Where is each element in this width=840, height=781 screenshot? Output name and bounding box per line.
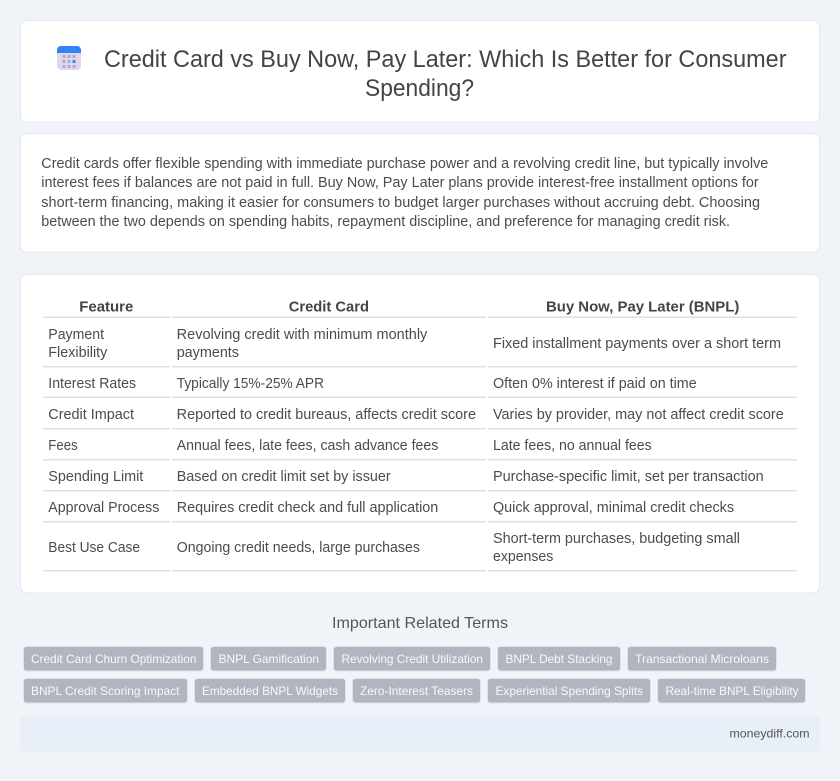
footer bar xyxy=(20,717,820,751)
related terms tags: Experiential Spending Splits xyxy=(496,684,643,698)
row: payment flexibility xyxy=(48,327,781,361)
icon: calendar xyxy=(57,46,81,70)
row: fees xyxy=(48,438,652,454)
related terms tags: Transactional Microloans xyxy=(635,652,769,666)
title: Spending? xyxy=(365,75,474,102)
row: credit impact: Varies by provider, may not affect credit score xyxy=(493,407,784,423)
row: approval process: Requires credit check and full application xyxy=(177,500,438,516)
row: interest rates xyxy=(48,376,697,392)
row: fees: Late fees, no annual fees xyxy=(493,438,652,454)
description text: interest fees if balances are not paid in full. Buy Now, Pay Later plans provide interest-free installment options for xyxy=(41,175,759,191)
footer bar: moneydiff.com xyxy=(730,726,810,740)
row: best use case: Best Use Case xyxy=(48,540,140,556)
row: payment flexibility: Payment xyxy=(48,327,104,343)
row: interest rates: Often 0% interest if paid on time xyxy=(493,376,697,392)
row: payment flexibility: payments xyxy=(177,345,239,361)
related terms heading: Important Related Terms xyxy=(332,615,508,632)
row: best use case: Ongoing credit needs, large purchases xyxy=(177,540,420,556)
row: interest rates: Interest Rates xyxy=(48,376,136,392)
related terms tags: Credit Card Churn Optimization xyxy=(31,652,196,666)
comparison table panel xyxy=(20,274,820,593)
row: credit impact xyxy=(48,407,784,423)
table header row: Feature xyxy=(79,298,133,316)
description text: between the two depends on spending habits, repayment discipline, and preference for managing credit risk. xyxy=(41,214,730,230)
related terms tags: Revolving Credit Utilization xyxy=(342,652,483,666)
row: payment flexibility: Revolving credit with minimum monthly xyxy=(177,327,428,343)
table header row: Buy Now, Pay Later (BNPL) xyxy=(546,298,739,316)
table header row xyxy=(79,298,739,316)
row: spending limit xyxy=(48,469,764,485)
row: payment flexibility: Fixed installment payments over a short term xyxy=(493,336,781,352)
title: Credit Card vs Buy Now, Pay Later: Which Is Better for Consumer xyxy=(104,46,787,73)
related terms tags: Real-time BNPL Eligibility xyxy=(666,684,798,698)
row: approval process xyxy=(48,500,734,516)
description text: short-term financing, making it easier for consumers to budget larger purchases without accruing debt. Choosing xyxy=(41,195,760,211)
row: spending limit: Spending Limit xyxy=(48,469,143,485)
related terms tags: Embedded BNPL Widgets xyxy=(202,684,338,698)
row: credit impact: Credit Impact xyxy=(48,407,134,423)
related terms tags: BNPL Debt Stacking xyxy=(506,652,612,666)
row: fees: Fees xyxy=(48,438,78,454)
related terms tags: BNPL Gamification xyxy=(218,652,319,666)
description text xyxy=(41,156,768,230)
row: credit impact: Reported to credit bureaus, affects credit score xyxy=(177,407,476,423)
table header row: Credit Card xyxy=(289,298,369,316)
row: interest rates: Typically 15%-25% APR xyxy=(177,376,324,392)
row: best use case: expenses xyxy=(493,549,553,565)
row: approval process: Approval Process xyxy=(48,500,159,516)
row: best use case xyxy=(48,531,740,565)
related terms tags xyxy=(24,646,806,703)
description text: Credit cards offer flexible spending with immediate purchase power and a revolving credit line, but typically involve xyxy=(41,156,768,172)
row: approval process: Quick approval, minimal credit checks xyxy=(493,500,734,516)
related terms tags: BNPL Credit Scoring Impact xyxy=(31,684,180,698)
row: best use case: Short-term purchases, budgeting small xyxy=(493,531,740,547)
row: fees: Annual fees, late fees, cash advance fees xyxy=(177,438,438,454)
title xyxy=(104,46,787,102)
related terms tags: Zero-Interest Teasers xyxy=(360,684,473,698)
header panel xyxy=(20,20,820,122)
description panel xyxy=(20,134,820,252)
row: payment flexibility: Flexibility xyxy=(48,345,108,361)
row: spending limit: Based on credit limit set by issuer xyxy=(177,469,391,485)
row: spending limit: Purchase-specific limit, set per transaction xyxy=(493,469,764,485)
